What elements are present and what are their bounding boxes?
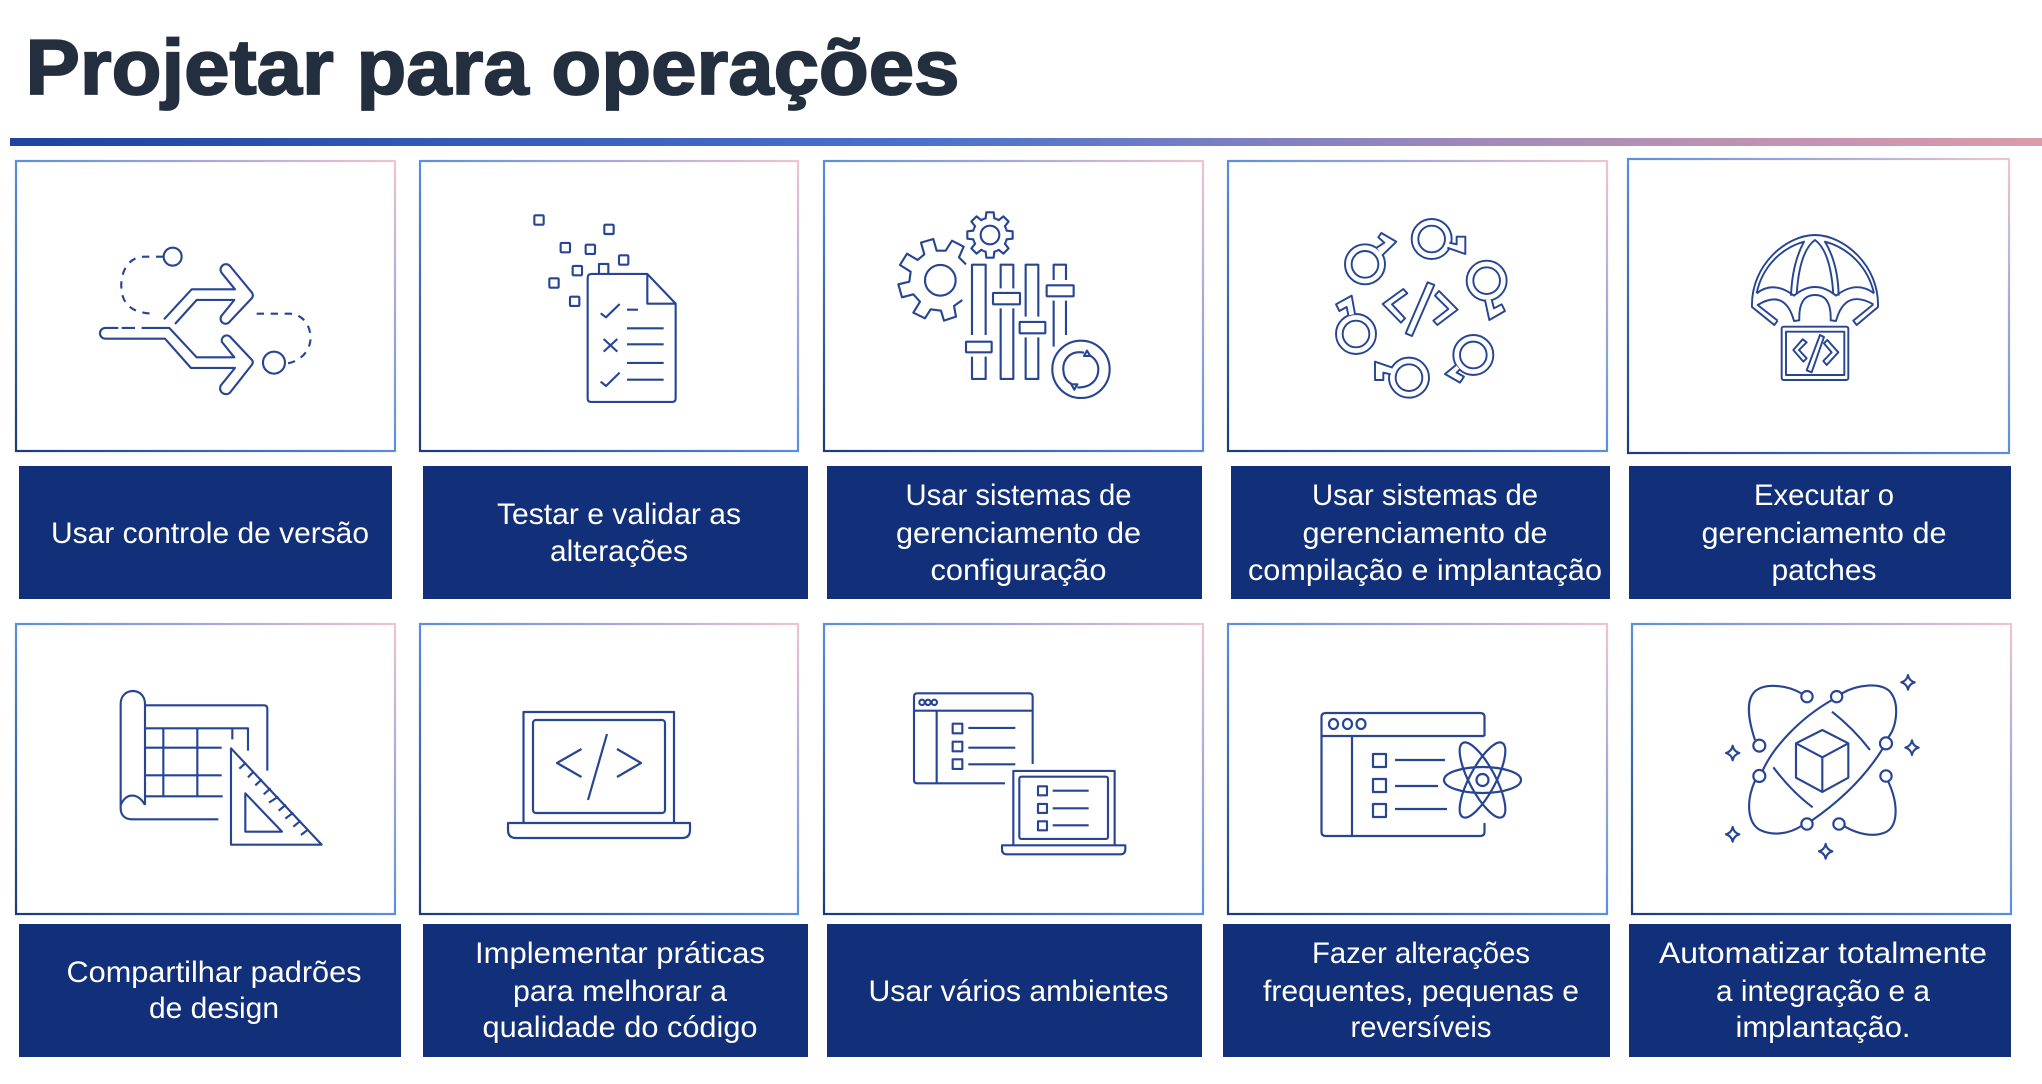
icon: blueprint and set square — [121, 691, 322, 845]
label: sistemas de configuração: configuração — [930, 554, 1106, 587]
title: Projetar para operações — [26, 23, 960, 111]
panel: sistemas de configuração — [824, 161, 1203, 599]
label: automatizar integração: a integração e a — [1716, 975, 1931, 1008]
icon: laptop with code — [508, 712, 690, 838]
label: qualidade do código — [423, 924, 808, 1057]
icon: gears and sliders — [898, 212, 1110, 398]
label: testar e validar — [423, 466, 808, 599]
label: gerenciamento de patches: gerenciamento de — [1702, 517, 1946, 550]
icon: parachute with code box — [1752, 235, 1878, 380]
label: qualidade do código: qualidade do código — [482, 1011, 758, 1044]
label: padrões de design: Compartilhar padrões — [66, 956, 362, 989]
label: testar e validar: alterações — [550, 535, 688, 568]
label: qualidade do código: para melhorar a — [513, 975, 728, 1008]
label: alterações frequentes — [1223, 924, 1610, 1057]
label: automatizar integração: Automatizar totalmente — [1659, 937, 1987, 970]
panel: qualidade do código — [420, 624, 808, 1057]
panel: vários ambientes — [824, 624, 1203, 1057]
label: padrões de design: de design — [149, 992, 279, 1025]
icon: cube with orbits — [1726, 675, 1919, 859]
label: sistemas de configuração: gerenciamento de — [896, 517, 1141, 550]
panel: usar controle de versão — [16, 161, 395, 599]
icon: code with rings — [1336, 219, 1507, 398]
panel: gerenciamento de patches — [1628, 159, 2011, 599]
panel: padrões de design — [16, 624, 401, 1057]
label: compilação e implantação: Usar sistemas de — [1312, 479, 1538, 512]
label: qualidade do código: Implementar práticas — [475, 937, 765, 970]
label: usar controle de versão: Usar controle de versão — [51, 517, 369, 550]
panel: alterações frequentes — [1223, 624, 1610, 1057]
label: sistemas de configuração: Usar sistemas de — [906, 479, 1132, 512]
panel: compilação e implantação — [1228, 161, 1610, 599]
label: compilação e implantação: compilação e implantação — [1248, 554, 1602, 587]
label: sistemas de configuração — [827, 466, 1202, 599]
label: gerenciamento de patches — [1629, 466, 2011, 599]
label: gerenciamento de patches: patches — [1772, 554, 1876, 587]
label: vários ambientes: Usar vários ambientes — [868, 975, 1168, 1008]
icon: window and laptop — [914, 693, 1125, 854]
label: alterações frequentes: frequentes, pequenas e — [1263, 975, 1579, 1008]
label: alterações frequentes: reversíveis — [1350, 1011, 1492, 1044]
icon: checklist document — [534, 215, 676, 402]
label: automatizar integração: implantação. — [1736, 1011, 1910, 1044]
label: automatizar integração — [1629, 924, 2011, 1057]
label: compilação e implantação — [1231, 466, 1610, 599]
panel: automatizar integração — [1629, 624, 2011, 1057]
label: compilação e implantação: gerenciamento de — [1302, 517, 1548, 550]
icon: branching arrows — [100, 248, 311, 394]
label: gerenciamento de patches: Executar o — [1754, 479, 1894, 512]
label: usar controle de versão — [19, 466, 392, 599]
label: alterações frequentes: Fazer alterações — [1312, 937, 1530, 970]
label: padrões de design — [19, 924, 401, 1057]
label: testar e validar: Testar e validar as — [497, 498, 741, 531]
icon: window with atom — [1322, 713, 1521, 836]
label: vários ambientes — [827, 924, 1202, 1057]
panel: testar e validar — [420, 161, 808, 599]
